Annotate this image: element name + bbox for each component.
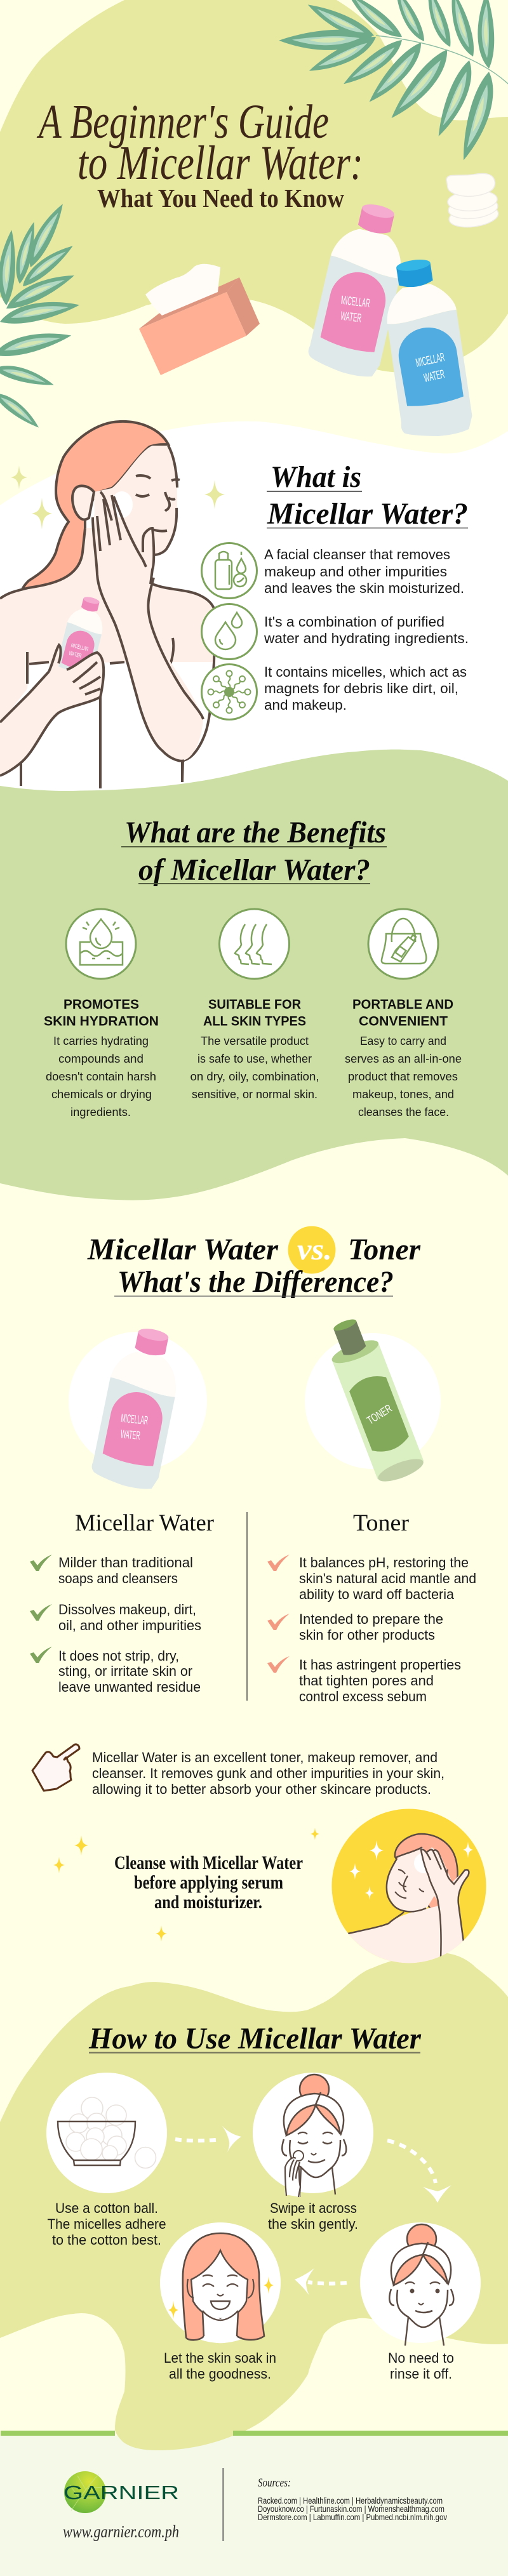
text: what is 3: magnets for debris like dirt, oil,	[264, 681, 458, 696]
mini bottle in hand: WATER	[68, 650, 83, 660]
benefit 3 text: cleanses the face.	[358, 1105, 449, 1119]
arrow: step 3 to 4	[295, 2268, 347, 2295]
text: what is 1: A facial cleanser that removes	[264, 547, 450, 562]
benefit 2 text: sensitive, or normal skin.	[192, 1087, 318, 1101]
list: micellar water points: sting, or irritate skin or	[58, 1663, 192, 1679]
step 3 caption: rinse it off.	[390, 2366, 452, 2382]
benefit 3 text: serves as an all-in-one	[345, 1052, 462, 1065]
list: micellar water points: Milder than traditional	[58, 1555, 193, 1570]
title	[36, 95, 363, 213]
benefit 1 text: compounds and	[58, 1052, 144, 1065]
garnier logo	[64, 2471, 179, 2513]
benefit 3 text: Easy to carry and	[360, 1034, 446, 1047]
benefit 1 text: ingredients.	[70, 1105, 131, 1119]
title: to Micellar Water:	[77, 136, 363, 190]
sources: Doyouknow.co | Furtunaskin.com | Womenshealthmag.com	[258, 2504, 444, 2514]
step 2 illustration: swiping cotton	[253, 2073, 373, 2197]
column heading: micellar water: Micellar Water	[75, 1510, 214, 1536]
list: micellar water points	[30, 1555, 201, 1695]
step 3 caption	[388, 2350, 454, 2382]
benefit 3 text: PORTABLE AND	[352, 997, 453, 1012]
step 2 caption: Swipe it across	[270, 2200, 357, 2216]
benefit 3 text: CONVENIENT	[359, 1014, 448, 1028]
blue micellar water bottle: WATER	[423, 368, 446, 385]
list: toner points: It balances pH, restoring the	[299, 1555, 469, 1570]
benefit 3 text	[345, 997, 462, 1119]
heading: benefits: of Micellar Water?	[138, 853, 370, 887]
illustration: woman cleansing face	[0, 422, 215, 788]
callout text	[92, 1749, 444, 1797]
icon: pointing hand	[32, 1744, 79, 1791]
sparkles around tip	[53, 1828, 319, 1942]
list: toner points: skin's natural acid mantle and	[299, 1570, 476, 1586]
callout text: Micellar Water is an excellent toner, makeup remover, and	[92, 1749, 438, 1765]
sources: Racked.com | Healthline.com | Herbaldynamicsbeauty.com	[258, 2496, 443, 2506]
icon: bottle and drops	[202, 543, 257, 598]
step 4 illustration: happy face	[160, 2222, 281, 2343]
title: What You Need to Know	[97, 183, 344, 213]
benefit 1 text: SKIN HYDRATION	[44, 1014, 159, 1028]
decorative leaves left	[0, 200, 81, 431]
heading: benefits: What are the Benefits	[124, 816, 386, 849]
arrow: step 1 to 2	[175, 2125, 241, 2153]
comparison bottle: toner: TONER	[364, 1402, 394, 1427]
icon: face profiles	[220, 909, 290, 979]
website: www.garnier.com.ph	[63, 2522, 179, 2541]
heading: micellar water vs toner	[87, 1226, 421, 1299]
icon: micelle	[202, 664, 257, 720]
benefit 1 text: doesn't contain harsh	[46, 1070, 156, 1083]
pink micellar water bottle	[305, 197, 415, 380]
text: what is 2: water and hydrating ingredients.	[264, 630, 469, 646]
heading: benefits	[121, 816, 387, 887]
list: toner points: that tighten pores and	[299, 1673, 434, 1689]
tissue box	[139, 264, 260, 375]
heading: micellar water vs toner: Toner	[348, 1233, 421, 1266]
step 1 caption	[47, 2200, 166, 2248]
footer divider	[222, 2468, 224, 2541]
text: what is 3	[264, 664, 467, 713]
list: toner points: ability to ward off bacteria	[299, 1586, 455, 1602]
column heading: toner: Toner	[353, 1510, 409, 1536]
benefit 1 text	[44, 997, 159, 1119]
step 4 caption: Let the skin soak in	[164, 2350, 276, 2366]
callout text: cleanser. It removes gunk and other impurities in your skin,	[92, 1765, 444, 1781]
icon: cotton pads	[446, 173, 500, 230]
step 1 caption: to the cotton best.	[52, 2232, 161, 2248]
step 3 caption: No need to	[388, 2350, 454, 2366]
list: micellar water points: soaps and cleansers	[58, 1570, 178, 1586]
title: A Beginner's Guide	[36, 95, 329, 149]
comparison bottle: micellar water: WATER	[120, 1427, 141, 1442]
comparison bottle: micellar water	[69, 1323, 207, 1492]
step 2 caption: the skin gently.	[268, 2216, 358, 2232]
benefit 1 text: PROMOTES	[64, 997, 139, 1012]
list: micellar water points: It does not strip, dry,	[58, 1648, 179, 1664]
heading: micellar water vs toner: vs.	[297, 1233, 332, 1266]
sources	[258, 2476, 447, 2522]
list: toner points: It has astringent properties	[299, 1657, 461, 1673]
heading: what is micellar water: Micellar Water?	[267, 497, 468, 531]
column divider	[246, 1512, 248, 1701]
list: toner points: skin for other products	[299, 1627, 435, 1643]
icon: water drops	[202, 604, 257, 659]
illustration: woman in yellow circle	[331, 1809, 486, 1968]
icon: skin hydration	[66, 909, 136, 979]
comparison bottle: toner	[305, 1313, 441, 1486]
callout text: allowing it to better absorb your other skincare products.	[92, 1781, 431, 1797]
benefit 2 text: The versatile product	[201, 1034, 309, 1047]
text: what is 2: It's a combination of purified	[264, 614, 444, 630]
text: what is 3: and makeup.	[264, 697, 347, 713]
olive blob behind header	[0, 0, 508, 373]
benefit 2 text: ALL SKIN TYPES	[203, 1014, 306, 1028]
sources: Sources:	[258, 2476, 291, 2490]
benefit 3 text: makeup, tones, and	[352, 1087, 454, 1101]
blue micellar water bottle	[377, 255, 474, 442]
arrow: step 2 to 3	[387, 2141, 451, 2203]
benefit 1 text: chemicals or drying	[51, 1087, 152, 1101]
pink micellar water bottle: WATER	[340, 310, 362, 326]
icon: bag with bottle	[368, 909, 438, 979]
tip text	[114, 1852, 303, 1913]
benefit 2 text	[190, 997, 319, 1101]
pink micellar water bottle: MICELLAR	[340, 294, 371, 310]
tip text: and moisturizer.	[154, 1892, 262, 1913]
text: what is 1: and leaves the skin moisturized.	[264, 580, 464, 596]
garnier logo: GARNIER	[64, 2481, 179, 2504]
decorative leaves top right	[279, 0, 508, 164]
text: what is 3: It contains micelles, which act as	[264, 664, 467, 680]
list: micellar water points: oil, and other impurities	[58, 1617, 201, 1633]
sources: Dermstore.com | Labmuffin.com | Pubmed.ncbi.nlm.nih.gov	[258, 2513, 447, 2522]
list: micellar water points: leave unwanted residue	[58, 1679, 201, 1695]
heading: how to use: How to Use Micellar Water	[88, 2022, 422, 2055]
mini bottle in hand: MICELLAR	[70, 642, 89, 653]
step 1 caption: The micelles adhere	[47, 2216, 166, 2232]
olive blob behind how-to section	[0, 1953, 508, 2450]
sparkles around woman	[11, 465, 225, 529]
heading: micellar water vs toner: What's the Difference?	[117, 1265, 394, 1299]
benefit 1 text: It carries hydrating	[53, 1034, 149, 1047]
benefit 3 text: product that removes	[348, 1070, 458, 1083]
text: what is 1	[264, 547, 464, 596]
list: micellar water points: Dissolves makeup, dirt,	[58, 1602, 196, 1617]
heading: what is micellar water	[267, 460, 468, 531]
tip text: Cleanse with Micellar Water	[114, 1852, 303, 1873]
list: toner points	[267, 1555, 476, 1704]
benefit 2 text: is safe to use, whether	[197, 1052, 312, 1065]
heading: micellar water vs toner: Micellar Water	[87, 1233, 279, 1266]
step 2 caption	[268, 2200, 358, 2232]
text: what is 2	[264, 614, 469, 646]
list: toner points: control excess sebum	[299, 1689, 427, 1704]
step 3 illustration: no rinse	[360, 2222, 481, 2346]
step 4 caption: all the goodness.	[169, 2366, 271, 2382]
comparison bottle: micellar water: MICELLAR	[121, 1411, 149, 1427]
green benefits band	[0, 750, 508, 1200]
white wave band behind what-is section	[0, 422, 508, 825]
step 4 caption	[164, 2350, 276, 2382]
list: toner points: Intended to prepare the	[299, 1611, 443, 1627]
heading: what is micellar water: What is	[271, 460, 361, 494]
mini bottle in hand	[53, 593, 110, 685]
benefit 2 text: on dry, oily, combination,	[190, 1070, 319, 1083]
text: what is 1: makeup and other impurities	[264, 564, 447, 580]
tip text: before applying serum	[134, 1872, 283, 1893]
blue micellar water bottle: MICELLAR	[415, 351, 446, 370]
step 1 illustration: cotton balls in bowl	[46, 2073, 167, 2193]
footer	[0, 2427, 508, 2576]
benefit 2 text: SUITABLE FOR	[208, 997, 301, 1012]
step 1 caption: Use a cotton ball.	[55, 2200, 158, 2216]
